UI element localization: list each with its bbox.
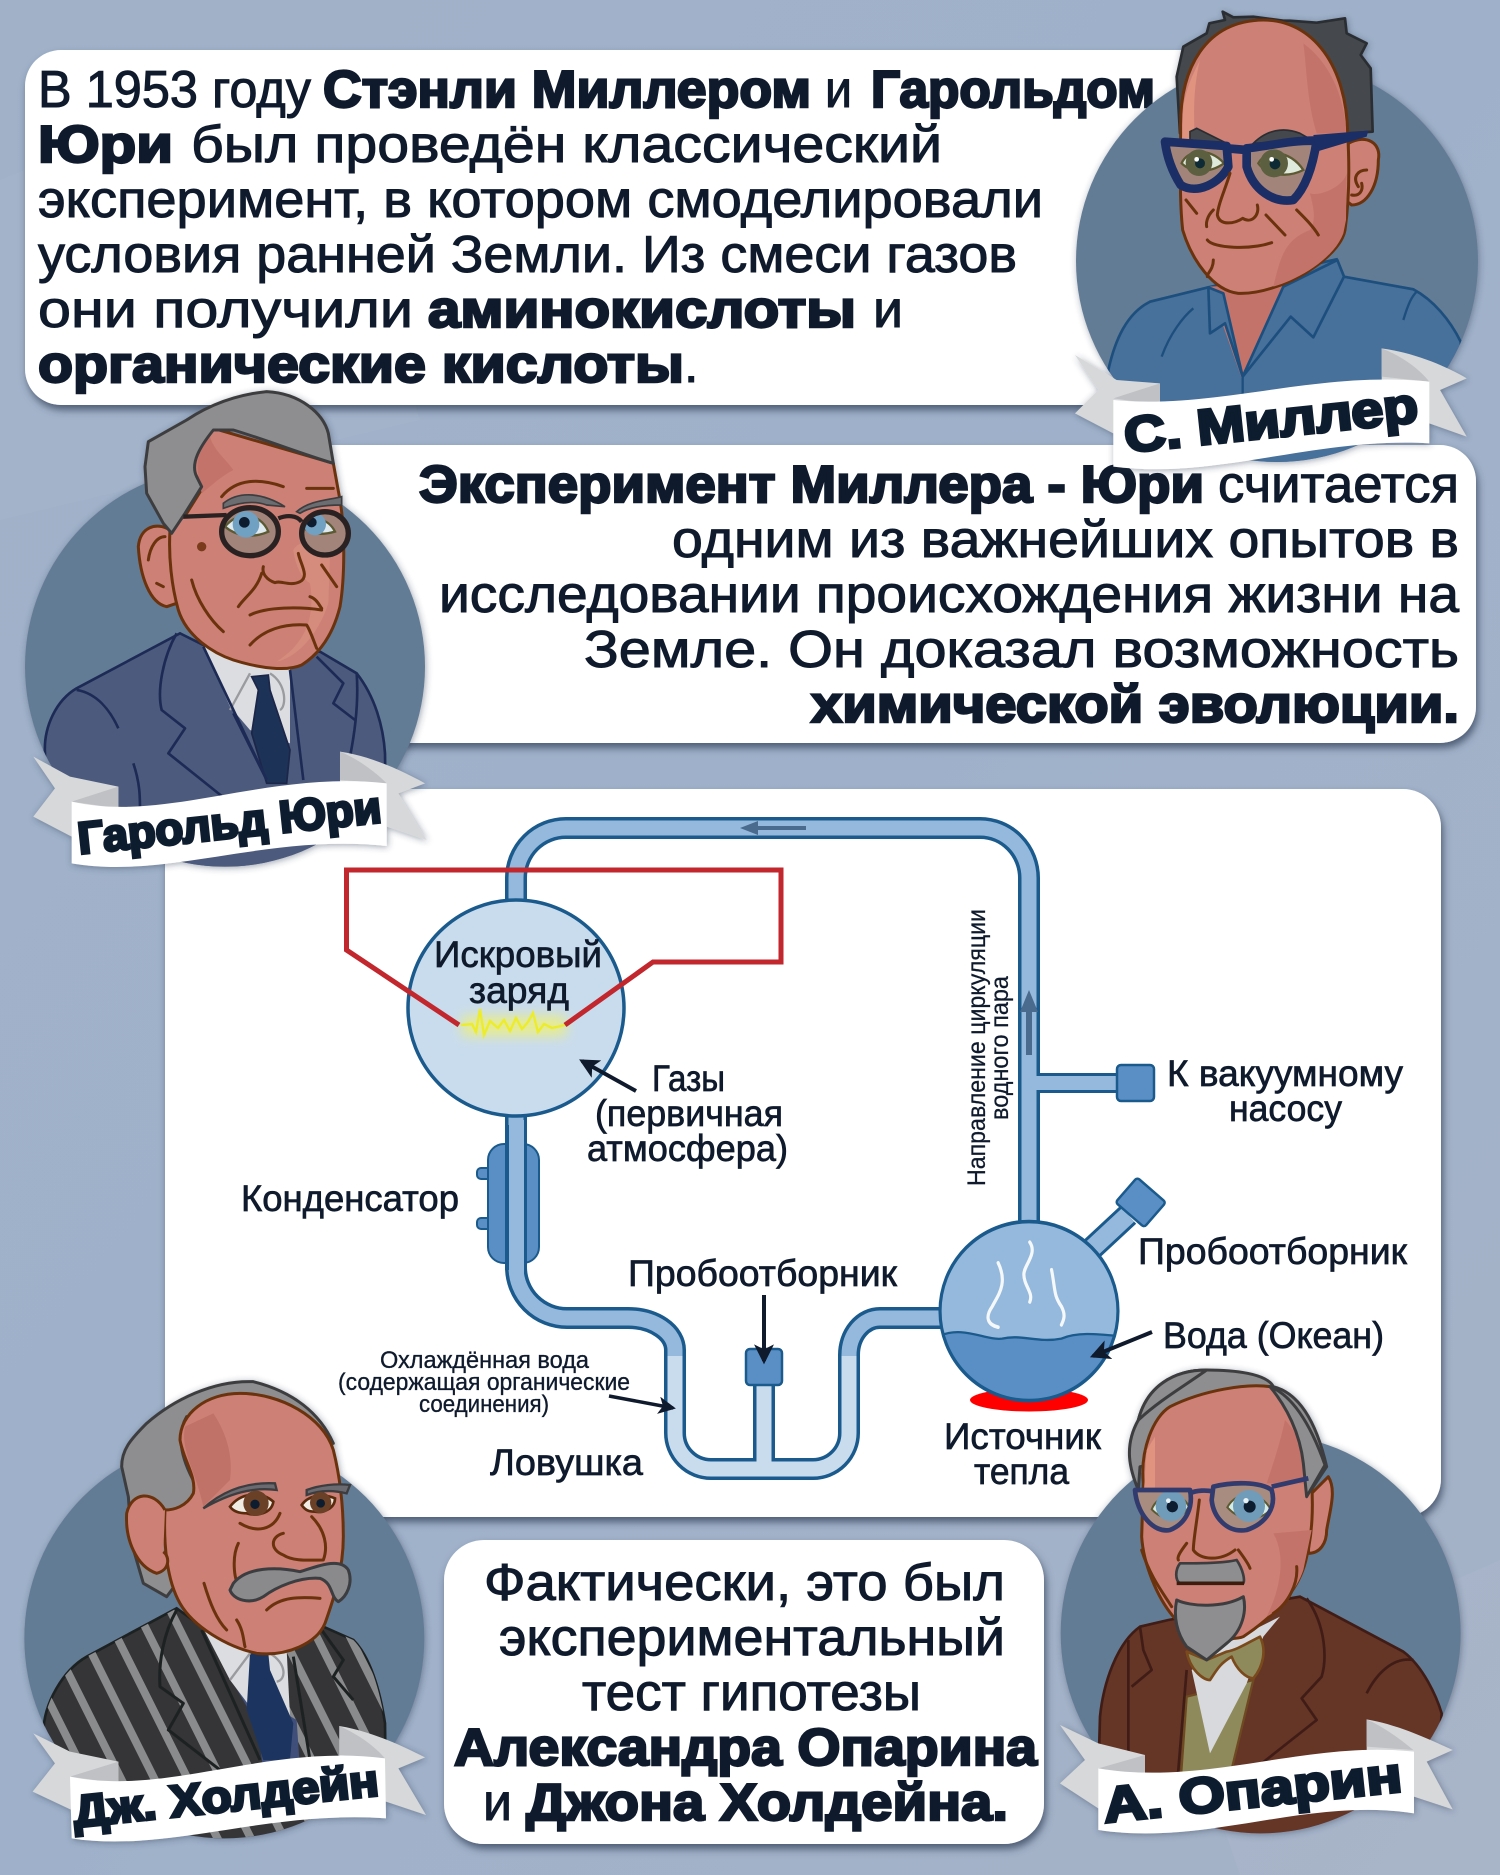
label: gases: (первичная	[595, 1093, 783, 1134]
jacket	[1097, 1597, 1442, 1837]
name ribbon	[1060, 1719, 1453, 1834]
text: intro paragraph: и	[825, 61, 852, 119]
ear	[1308, 1477, 1332, 1553]
label: vacuum pump: К вакуумному	[1167, 1053, 1404, 1094]
ear	[138, 526, 177, 607]
heat source	[970, 1388, 1088, 1412]
brows and forehead	[222, 481, 333, 497]
sampler arm on flask	[1085, 1177, 1166, 1255]
label: heat source: Источник	[944, 1416, 1102, 1457]
text: intro paragraph: был проведён классический	[191, 116, 942, 174]
moustache	[1176, 1560, 1244, 1583]
hair	[1177, 12, 1373, 133]
arrow: gases	[582, 1061, 636, 1091]
label: sampler right: Пробоотборник	[1138, 1231, 1408, 1272]
text: intro paragraph: органические кислоты	[38, 336, 684, 394]
bow tie	[1187, 1637, 1263, 1680]
label: gases: атмосфера)	[587, 1128, 788, 1169]
name ribbon	[33, 1726, 426, 1842]
panel: intro text	[25, 50, 1265, 405]
nose and lines	[1142, 1500, 1297, 1613]
eyebrows	[1190, 128, 1312, 145]
label: vacuum pump	[1167, 1053, 1404, 1129]
label: cooled water: Охлаждённая вода	[380, 1347, 590, 1374]
tube: condenser outlet to trap	[516, 1100, 960, 1472]
hair	[1129, 1370, 1327, 1497]
ear	[127, 1496, 168, 1573]
head	[165, 1393, 343, 1654]
text: conclusion paragraph: и	[483, 1774, 512, 1832]
portrait: Urey	[25, 392, 427, 870]
suit	[43, 633, 387, 870]
panel: significance text	[250, 445, 1476, 743]
text: significance paragraph: Земле. Он доказал возможность	[584, 621, 1459, 679]
head	[1142, 1386, 1312, 1638]
text: intro paragraph: они получили	[38, 281, 413, 339]
shirt	[1107, 258, 1462, 462]
label: heat source	[944, 1416, 1102, 1492]
face lines	[192, 553, 337, 648]
label: trap: Ловушка	[490, 1442, 643, 1483]
label: condenser: Конденсатор	[241, 1178, 459, 1219]
name ribbon: С. Миллер	[1121, 377, 1421, 464]
ear	[1345, 139, 1379, 205]
vacuum port box	[1117, 1065, 1154, 1101]
arrow: cooled water	[609, 1396, 673, 1408]
mole	[197, 542, 206, 551]
name ribbon: Гарольд Юри	[75, 781, 384, 864]
face lines	[1186, 173, 1318, 277]
text: conclusion paragraph	[454, 1554, 1038, 1832]
name ribbon: Дж. Холдейн	[71, 1754, 381, 1837]
arrow: vertical flow direction	[1020, 990, 1038, 1055]
label: spark discharge: Искровый	[434, 934, 602, 975]
suit	[42, 1606, 386, 1838]
panel: conclusion text	[444, 1540, 1044, 1844]
text: significance paragraph: исследовании происхождения жизни на	[439, 566, 1459, 624]
text: significance paragraph: Эксперимент Миллера - Юри	[419, 456, 1204, 514]
portrait: Haldane	[22, 1376, 430, 1847]
text: intro paragraph: Гарольдом	[871, 61, 1155, 119]
label: gases	[587, 1058, 788, 1169]
boiling flask	[938, 1220, 1120, 1402]
spark flask	[408, 900, 624, 1116]
text: intro paragraph: аминокислоты	[428, 281, 856, 339]
head	[170, 428, 344, 669]
head	[1180, 20, 1349, 293]
text: significance paragraph: одним из важнейших опытов в	[672, 511, 1459, 569]
label: cooled water: (содержащая органические	[338, 1369, 630, 1396]
text: conclusion paragraph: экспериментальный	[499, 1609, 1005, 1667]
text: conclusion paragraph: Александра Опарина	[454, 1719, 1038, 1777]
text: intro paragraph	[38, 61, 1155, 394]
text: conclusion paragraph: Фактически, это был	[484, 1554, 1005, 1612]
arrow: sampler centre	[762, 1295, 766, 1361]
portrait: Oparin	[1060, 1370, 1461, 1837]
name ribbon	[33, 752, 427, 867]
moustache	[230, 1563, 350, 1602]
text: significance paragraph: химической эволюции.	[811, 676, 1459, 734]
text: intro paragraph: условия ранней Земли. Из смеси газов	[38, 226, 1017, 284]
label: gases: Газы	[652, 1058, 725, 1099]
label: cooled water: соединения)	[419, 1391, 549, 1418]
face lines	[204, 1513, 326, 1647]
hair	[122, 1382, 333, 1597]
label: heat source: тепла	[974, 1451, 1069, 1492]
text: conclusion paragraph: Джона Холдейна.	[526, 1774, 1008, 1832]
text: significance paragraph	[419, 456, 1459, 734]
label: cooled water	[338, 1347, 630, 1418]
spark	[461, 1009, 566, 1036]
text: intro paragraph: Стэнли Миллером	[323, 61, 811, 119]
glasses	[1135, 1478, 1308, 1530]
eyes and brows	[203, 1483, 350, 1516]
text: intro paragraph: .	[684, 336, 698, 394]
portrait: Miller	[1075, 12, 1478, 480]
label: vapour direction	[963, 909, 1014, 1186]
text: conclusion paragraph: тест гипотезы	[582, 1664, 921, 1722]
tube: upper vapour loop	[516, 828, 1120, 1235]
text: intro paragraph: эксперимент, в котором смоделировали	[38, 171, 1043, 229]
name ribbon	[1075, 348, 1467, 469]
electrode wire	[346, 870, 781, 1025]
name ribbon: А. Опарин	[1100, 1747, 1405, 1834]
panel: experiment diagram	[165, 789, 1441, 1517]
text: intro paragraph: В 1953 году	[38, 61, 311, 119]
label: water ocean: Вода (Океан)	[1163, 1315, 1384, 1356]
glasses	[183, 508, 348, 556]
text: intro paragraph: и	[873, 281, 903, 339]
label: vapour direction: водного пара	[986, 976, 1014, 1120]
label: spark discharge: заряд	[469, 970, 569, 1011]
label: vapour direction: Направление циркуляции	[963, 909, 991, 1186]
label: sampler centre: Пробоотборник	[628, 1253, 898, 1294]
condenser	[477, 1120, 539, 1275]
goatee	[1175, 1597, 1244, 1660]
arrow: top flow direction	[740, 821, 806, 835]
arrow: water	[1093, 1332, 1152, 1356]
glasses	[1165, 131, 1368, 201]
text: significance paragraph: считается	[1218, 456, 1459, 514]
sampler box: trap	[746, 1349, 782, 1385]
mouth	[1177, 1578, 1244, 1589]
text: intro paragraph: Юри	[38, 116, 173, 174]
label: vacuum pump: насосу	[1229, 1088, 1342, 1129]
label: spark discharge	[434, 934, 602, 1011]
hair	[145, 392, 333, 533]
